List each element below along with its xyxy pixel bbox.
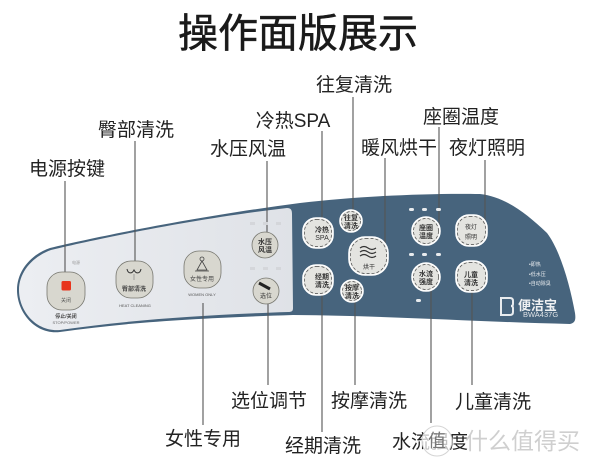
button labels: SPA xyxy=(315,235,329,242)
label: night light: 夜灯照明 xyxy=(449,137,525,159)
button labels: 清洗 xyxy=(344,221,358,230)
label: seat temperature: 座圈温度 xyxy=(423,106,499,128)
feature notes xyxy=(529,261,551,287)
panel: white area xyxy=(19,208,293,330)
button labels: 夜灯 xyxy=(465,223,477,231)
label: warm air: 暖风烘干 xyxy=(361,137,437,159)
brand logo: 便洁宝 xyxy=(518,298,557,313)
panel: blue body xyxy=(17,194,575,332)
button: water pressure xyxy=(252,232,278,258)
icon: warm air waves xyxy=(360,246,376,258)
label: position: 选位调节 xyxy=(231,390,307,412)
leader lines xyxy=(65,97,485,432)
button labels xyxy=(315,213,478,300)
button labels: 烘干 xyxy=(363,263,375,271)
button: hip cleaning xyxy=(116,261,153,298)
button labels: 温度 xyxy=(419,231,433,240)
button: women only xyxy=(184,251,221,288)
label: hip cleaning: 臀部清洗 xyxy=(98,119,174,141)
button labels: 经期 xyxy=(315,272,329,281)
label: period: 经期清洗 xyxy=(285,435,361,457)
watermark xyxy=(422,426,580,456)
feature notes: •自动除臭 xyxy=(529,280,551,287)
watermark: 什么值得买 xyxy=(465,428,580,454)
watermark: 值 xyxy=(428,431,446,451)
button labels: 儿童 xyxy=(464,270,478,279)
indicator lights xyxy=(409,208,441,302)
button: power xyxy=(47,272,85,310)
title: 操作面版展示 xyxy=(178,12,418,56)
label: power: 电源按键 xyxy=(29,158,105,180)
button labels: 清洗 xyxy=(345,291,359,300)
button outlines xyxy=(304,212,486,300)
button: hip cleaning: 臀部清洗 xyxy=(122,285,146,293)
feature notes: •即热 xyxy=(529,261,541,268)
label: SPA: 冷热SPA xyxy=(256,110,331,132)
label: water flow: 水流强度 xyxy=(392,431,468,453)
button labels: 往复 xyxy=(344,213,358,222)
button: position xyxy=(253,278,279,304)
button labels: 按摩 xyxy=(345,283,359,292)
button labels: 水流 xyxy=(419,269,433,278)
button: power: 关闭 xyxy=(61,297,71,304)
button labels: 冷热 xyxy=(315,225,329,234)
button labels: 强度 xyxy=(419,277,433,286)
white panel indicator lights xyxy=(250,222,281,270)
button labels: 座圈 xyxy=(419,223,433,232)
button: water pressure: 风温 xyxy=(258,245,272,254)
button: water pressure: 水压 xyxy=(258,237,272,246)
button labels: 照明 xyxy=(465,234,477,241)
button: women only: 女性专用 xyxy=(190,275,214,283)
label: water pressure: 水压风温 xyxy=(210,138,286,160)
label: children: 儿童清洗 xyxy=(455,391,531,413)
label: reciprocating: 往复清洗 xyxy=(316,74,392,96)
blue area buttons xyxy=(303,210,487,302)
button labels: 清洗 xyxy=(315,280,329,289)
feature notes: •低水压 xyxy=(529,271,546,278)
brand logo xyxy=(501,298,558,319)
brand logo: BWA437G xyxy=(523,310,558,319)
text: STOP/POWER xyxy=(52,320,80,325)
power caption: 停止/关闭 xyxy=(55,313,77,320)
label: massage: 按摩清洗 xyxy=(331,390,407,412)
label: women: 女性专用 xyxy=(165,428,241,450)
text: 电源 xyxy=(72,259,80,265)
control panel xyxy=(17,194,575,332)
hip caption: HEAT CLEANING xyxy=(119,303,151,308)
women caption: WOMEN ONLY xyxy=(188,292,216,297)
button labels: 清洗 xyxy=(464,278,478,287)
button: position: 选位 xyxy=(260,292,272,300)
